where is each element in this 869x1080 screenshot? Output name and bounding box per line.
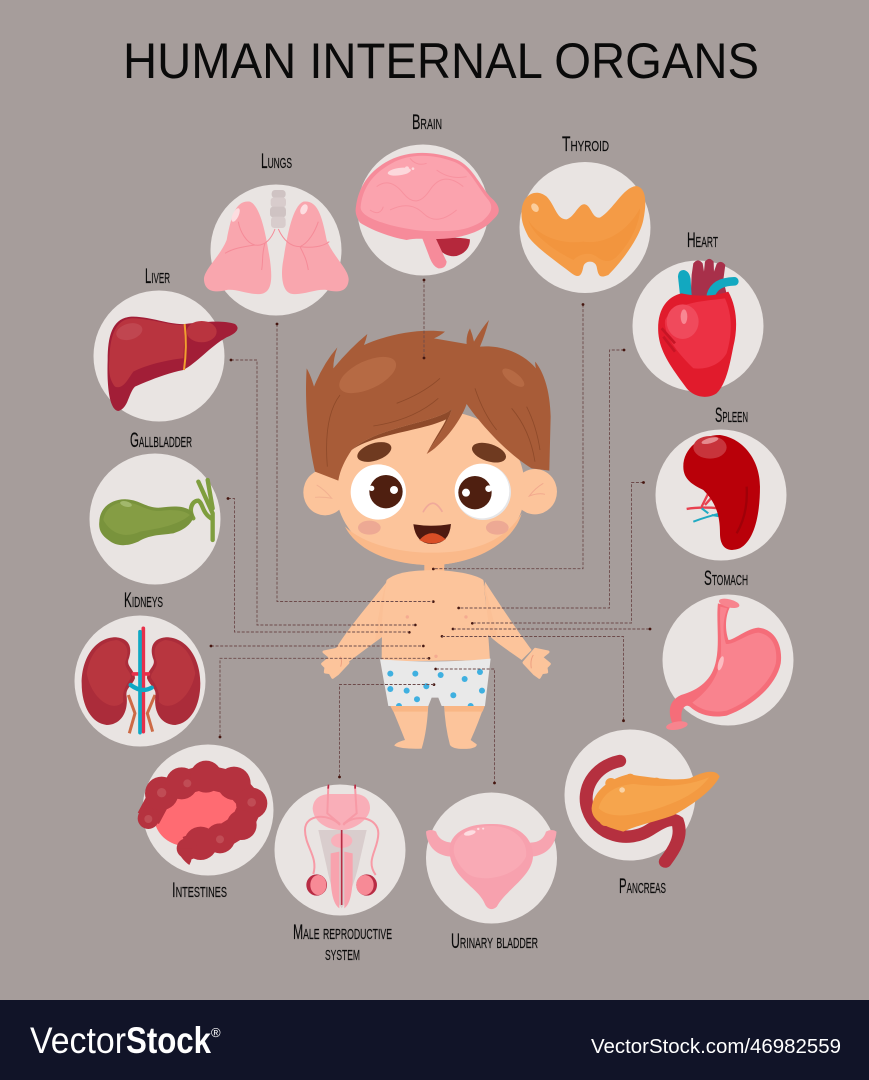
label: intestines: Intestines: [172, 879, 227, 902]
face: [335, 410, 525, 565]
label: kidneys: Kidneys: [124, 589, 163, 612]
connector: intestines: [219, 658, 429, 738]
connector: male reproductive system: [338, 684, 434, 778]
arms: [323, 580, 549, 677]
label: brain: Brain: [412, 111, 442, 134]
panel: pancreas: [564, 730, 720, 898]
connector: pancreas: [442, 636, 625, 722]
spleen illustration: [683, 435, 760, 550]
boy character: [303, 320, 557, 749]
panel: male reproductive system: [274, 784, 406, 965]
urinary bladder illustration: [426, 824, 557, 909]
underwear: [380, 659, 491, 706]
panel: heart: [632, 229, 764, 397]
connector: spleen: [472, 481, 645, 623]
panel: brain: [356, 111, 499, 276]
label: pancreas: Pancreas: [619, 875, 666, 898]
footer logo: Stock: [126, 1020, 211, 1061]
cheeks: [358, 521, 509, 535]
footer url: VectorStock.com/46982559: [591, 1036, 841, 1058]
brain illustration: [356, 153, 499, 268]
ears: [303, 469, 557, 515]
panel: lungs: [204, 150, 349, 316]
kidneys illustration: [82, 628, 200, 733]
panel: kidneys: [74, 589, 206, 746]
panel: intestines: [138, 744, 274, 902]
panel: spleen: [656, 404, 786, 560]
legs: [390, 703, 485, 749]
connector: brain: [423, 279, 425, 359]
footer logo: Vector: [30, 1020, 126, 1061]
heart illustration: [658, 259, 736, 397]
male reproductive illustration: [305, 785, 378, 908]
label: liver: Liver: [145, 265, 170, 288]
panel: liver: [94, 265, 238, 422]
eyebrows: [355, 438, 508, 466]
connector: stomach: [453, 628, 651, 630]
organ pointer dots: [408, 568, 474, 686]
label: male reproductive system: [293, 921, 392, 965]
connector: gallbladder: [227, 497, 409, 632]
label: male reproductive system: Male reproductive: [293, 921, 392, 944]
label: lungs: Lungs: [261, 150, 292, 173]
torso: [375, 560, 498, 662]
label: spleen: Spleen: [715, 404, 748, 427]
liver illustration: [107, 317, 238, 411]
eyes: [351, 464, 511, 520]
label: thyroid: Thyroid: [562, 133, 609, 156]
footer logo: [30, 1020, 221, 1061]
label: urinary bladder: Urinary bladder: [451, 930, 538, 953]
connector: kidneys: [210, 645, 423, 647]
stomach illustration: [665, 597, 781, 731]
panel: urinary bladder: [426, 792, 557, 953]
panel: stomach: [662, 567, 794, 731]
connector: thyroid: [433, 303, 584, 569]
hair: [306, 320, 551, 481]
intestines illustration: [138, 761, 267, 865]
label: stomach: Stomach: [704, 567, 748, 590]
footer logo: ®: [211, 1025, 221, 1040]
nose: [423, 503, 442, 512]
mouth: [413, 524, 451, 544]
pancreas illustration: [586, 761, 720, 862]
label: male reproductive system: system: [325, 942, 360, 965]
connector: lungs: [276, 323, 433, 602]
label: heart: Heart: [687, 229, 718, 252]
panel: thyroid: [520, 133, 650, 293]
panel: gallbladder: [90, 429, 220, 584]
label: gallbladder: Gallbladder: [130, 429, 192, 452]
gallbladder illustration: [99, 480, 213, 545]
thyroid illustration: [521, 186, 645, 277]
connector: heart: [459, 349, 625, 608]
connector: urinary bladder: [436, 669, 496, 784]
connector: liver: [230, 359, 415, 625]
lungs illustration: [204, 190, 349, 294]
title: HUMAN INTERNAL ORGANS: [123, 33, 759, 89]
footer bar: [0, 1000, 869, 1080]
